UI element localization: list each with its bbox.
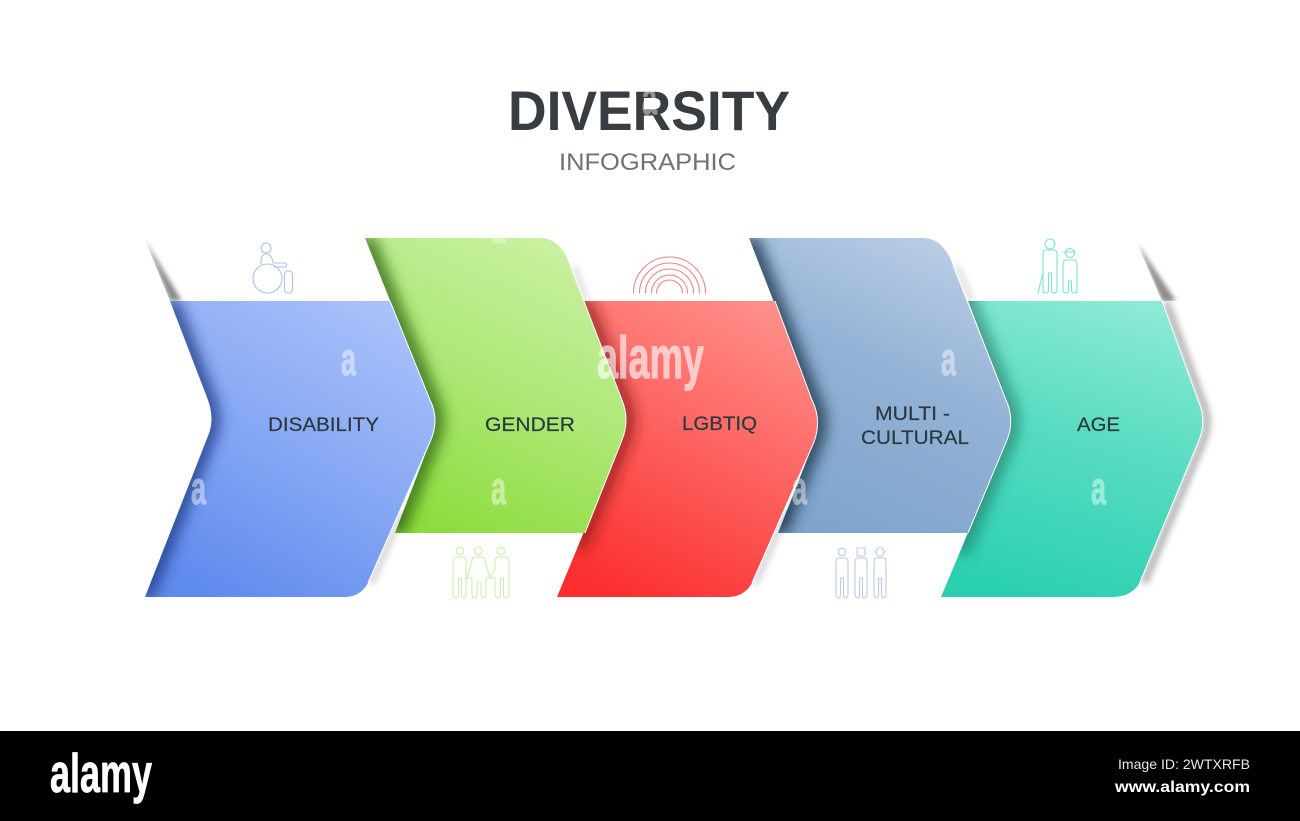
icon: gender figures bbox=[453, 547, 509, 598]
label: DISABILITY: DISABILITY bbox=[268, 414, 379, 436]
label: LGBTIQ: LGBTIQ bbox=[682, 413, 757, 435]
panel: gender bbox=[365, 238, 626, 598]
icon: wheelchair bbox=[253, 243, 292, 293]
icon: rainbow bbox=[634, 257, 706, 293]
panel: age bbox=[941, 239, 1207, 597]
watermark: a bbox=[341, 333, 356, 385]
watermark on title: a bbox=[642, 72, 657, 124]
watermark bbox=[493, 238, 506, 243]
watermark: a bbox=[491, 462, 506, 514]
watermark: alamy: alamy bbox=[597, 325, 704, 391]
label: MULTI-CULTURAL: CULTURAL bbox=[861, 427, 969, 449]
label: GENDER: GENDER bbox=[485, 414, 575, 436]
panel: disability bbox=[145, 240, 435, 597]
footer bar bbox=[0, 731, 1300, 821]
image id: Image ID: 2WTXRFB bbox=[1118, 756, 1250, 772]
footer url: www.alamy.com bbox=[1114, 779, 1250, 796]
watermark: a bbox=[792, 462, 807, 514]
label: MULTI-CULTURAL bbox=[861, 403, 969, 449]
label: AGE: AGE bbox=[1077, 414, 1120, 436]
icon: elderly and child figures bbox=[1038, 239, 1077, 293]
subheading: INFOGRAPHIC: INFOGRAPHIC bbox=[559, 149, 736, 176]
watermark: a bbox=[941, 333, 956, 385]
footer logo: alamy bbox=[50, 742, 152, 804]
watermark: a bbox=[1091, 462, 1106, 514]
watermark: a bbox=[191, 462, 206, 514]
icon: three figures bbox=[836, 548, 886, 598]
label: MULTI-CULTURAL: MULTI - bbox=[875, 403, 950, 425]
heading: DIVERSITY: DIVERSITY bbox=[508, 79, 790, 142]
panel: lgbtiq bbox=[557, 257, 818, 597]
title bbox=[508, 79, 790, 176]
panel: multi-cultural bbox=[749, 238, 1011, 598]
